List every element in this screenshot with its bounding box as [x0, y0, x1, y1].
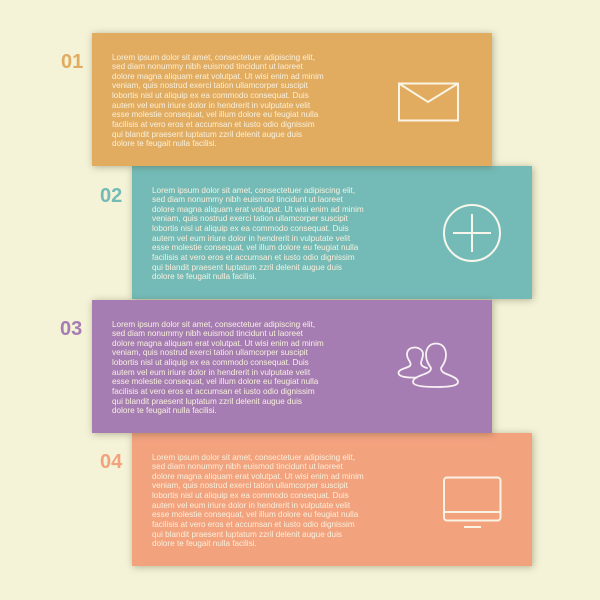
number 03: 03 — [60, 318, 82, 340]
text block 1: sed diam nonummy nibh euismod tincidunt ut laoreet — [112, 62, 303, 71]
text block 3: autem vel eum iriure dolor in hendrerit in vulputate velit — [112, 368, 310, 377]
number 02: 02 — [100, 185, 122, 207]
text block 3: facilisis at vero eros et accumsan et iusto odio dignissim — [112, 387, 315, 396]
text block 1: dolore te feugait nulla facilisi. — [112, 139, 217, 148]
text block 4: facilisis at vero eros et accumsan et iusto odio dignissim — [152, 520, 355, 529]
text block 1: facilisis at vero eros et accumsan et iusto odio dignissim — [112, 120, 315, 129]
icon: monitor — [443, 476, 502, 528]
text block 1: qui blandit praesent luptatum zzril delenit augue duis — [112, 130, 302, 138]
text block 2: autem vel eum iriure dolor in hendrerit in vulputate velit — [152, 234, 350, 243]
text block 2: lobortis nisl ut aliquip ex ea commodo consequat. Duis — [152, 224, 349, 233]
text block 4: lobortis nisl ut aliquip ex ea commodo consequat. Duis — [152, 491, 349, 500]
panel 1: orange — [92, 33, 492, 166]
text block 3 — [112, 320, 324, 415]
text block 2: dolore magna aliquam erat volutpat. Ut wisi enim ad minim — [152, 205, 364, 214]
text block 3: Lorem ipsum dolor sit amet, consectetuer adipiscing elit, — [112, 320, 315, 328]
icon: plus in circle — [443, 204, 501, 262]
text block 3: dolore magna aliquam erat volutpat. Ut wisi enim ad minim — [112, 339, 324, 348]
text block 4: qui blandit praesent luptatum zzril delenit augue duis — [152, 530, 342, 538]
panel 2: teal — [132, 166, 532, 299]
text block 3: sed diam nonummy nibh euismod tincidunt ut laoreet — [112, 329, 303, 338]
icon: two people — [398, 342, 459, 388]
number 01: 01 — [61, 51, 83, 73]
text block 4: dolore magna aliquam erat volutpat. Ut wisi enim ad minim — [152, 472, 364, 481]
text block 3: veniam, quis nostrud exerci tation ullamcorper suscipit — [112, 348, 308, 357]
text block 1: lobortis nisl ut aliquip ex ea commodo consequat. Duis — [112, 91, 309, 100]
text block 1 — [112, 52, 324, 148]
text block 3: esse molestie consequat, vel illum dolore eu feugiat nulla — [112, 377, 318, 386]
text block 2: sed diam nonummy nibh euismod tincidunt ut laoreet — [152, 195, 343, 204]
text block 4: esse molestie consequat, vel illum dolore eu feugiat nulla — [152, 510, 358, 519]
text block 4: dolore te feugait nulla facilisi. — [152, 539, 257, 548]
panel 4: salmon — [132, 433, 532, 566]
number 04: 04 — [100, 451, 122, 473]
text block 2: esse molestie consequat, vel illum dolore eu feugiat nulla — [152, 243, 358, 252]
panel 3: purple — [92, 300, 492, 433]
text block 4: autem vel eum iriure dolor in hendrerit in vulputate velit — [152, 501, 350, 510]
text block 1: autem vel eum iriure dolor in hendrerit in vulputate velit — [112, 101, 310, 110]
text block 2: Lorem ipsum dolor sit amet, consectetuer adipiscing elit, — [152, 186, 355, 194]
text block 3: dolore te feugait nulla facilisi. — [112, 406, 217, 415]
icon: envelope — [398, 82, 459, 122]
text block 1: Lorem ipsum dolor sit amet, consectetuer adipiscing elit, — [112, 52, 315, 62]
text block 3: qui blandit praesent luptatum zzril delenit augue duis — [112, 396, 302, 406]
text block 2: qui blandit praesent luptatum zzril delenit augue duis — [152, 262, 342, 272]
text block 2: facilisis at vero eros et accumsan et iusto odio dignissim — [152, 253, 355, 262]
text block 1: esse molestie consequat, vel illum dolore eu feugiat nulla — [112, 110, 318, 119]
text block 2: dolore te feugait nulla facilisi. — [152, 272, 257, 281]
text block 4 — [152, 452, 364, 548]
text block 4: veniam, quis nostrud exerci tation ullamcorper suscipit — [152, 481, 348, 490]
text block 3: lobortis nisl ut aliquip ex ea commodo consequat. Duis — [112, 358, 309, 367]
text block 1: veniam, quis nostrud exerci tation ullamcorper suscipit — [112, 81, 308, 90]
text block 2 — [152, 186, 364, 281]
text block 4: sed diam nonummy nibh euismod tincidunt ut laoreet — [152, 462, 343, 471]
text block 2: veniam, quis nostrud exerci tation ullamcorper suscipit — [152, 214, 348, 223]
text block 1: dolore magna aliquam erat volutpat. Ut wisi enim ad minim — [112, 72, 324, 81]
text block 4: Lorem ipsum dolor sit amet, consectetuer adipiscing elit, — [152, 452, 355, 462]
